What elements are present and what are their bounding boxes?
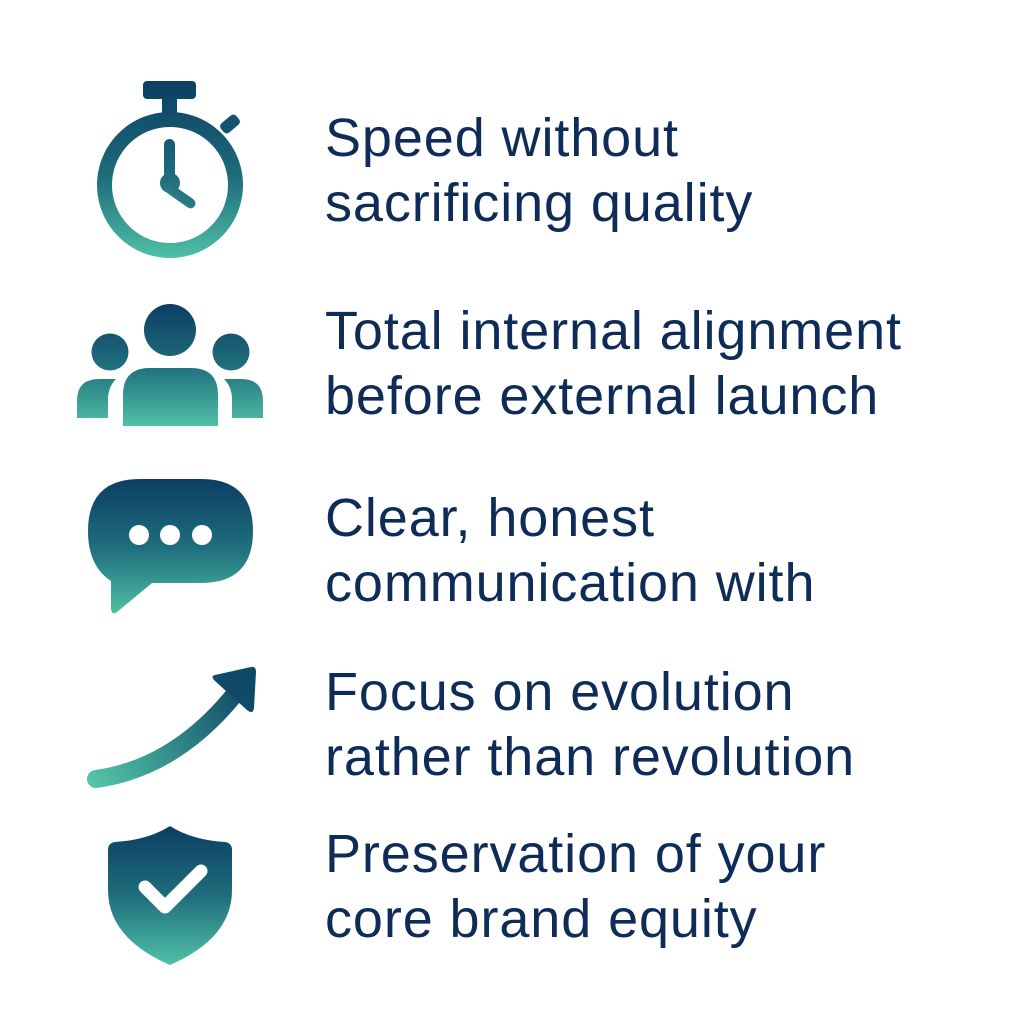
text: speed	[325, 108, 753, 233]
text: communication: Clear, honest	[325, 488, 655, 548]
text: brand equity	[325, 824, 826, 949]
text: alignment: before external launch	[325, 366, 879, 426]
text: speed: Speed without	[325, 108, 679, 168]
text: evolution: Focus on evolution	[325, 662, 794, 722]
icon: team	[77, 304, 263, 426]
text: communication: communication with	[325, 553, 815, 613]
text: brand equity: core brand equity	[325, 889, 758, 949]
icon: stopwatch	[97, 81, 243, 258]
text: evolution: rather than revolution	[325, 727, 855, 787]
text: alignment: Total internal alignment	[325, 301, 902, 361]
text: alignment	[325, 301, 902, 426]
text: evolution	[325, 662, 855, 787]
text: brand equity: Preservation of your	[325, 824, 826, 884]
text: speed: sacrificing quality	[325, 173, 753, 233]
text: communication	[325, 488, 815, 613]
icon: speech bubble	[88, 479, 253, 613]
icon: shield check	[108, 826, 232, 965]
icon: growth arrow	[96, 667, 256, 779]
